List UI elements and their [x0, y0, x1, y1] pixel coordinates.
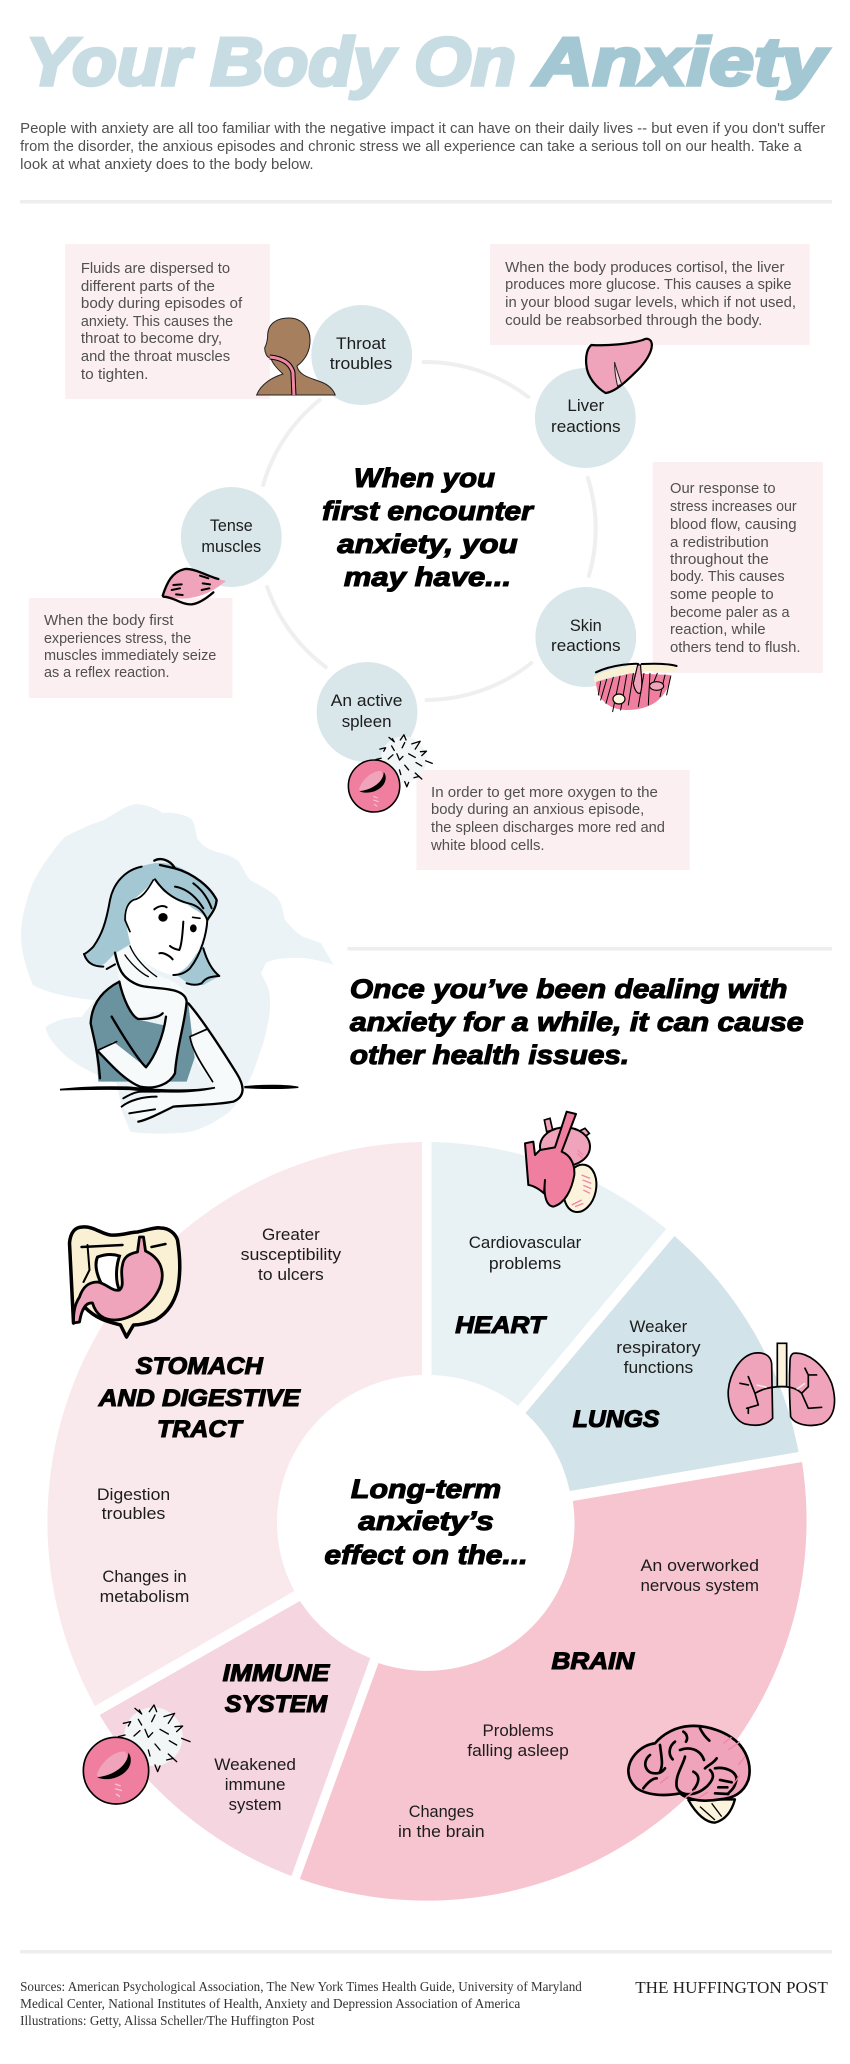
labels: stomach and digestive tract: Greater — [262, 1225, 320, 1244]
illustration: anxious woman — [21, 804, 334, 1134]
footer: sources: Medical Center, National Institutes of Health, Anxiety and Depression Association of America — [20, 1996, 521, 2012]
panel: liver reactions: produces more glucose. This causes a spike — [505, 276, 792, 293]
panel: throat troubles: different parts of the — [81, 278, 215, 295]
labels: brain — [398, 1556, 759, 1841]
labels: stomach and digestive tract: STOMACH — [136, 1353, 263, 1380]
panel: liver reactions: Liver — [567, 396, 605, 415]
labels: heart: Cardiovascular — [469, 1233, 582, 1252]
labels: brain: nervous system — [640, 1576, 759, 1595]
panel: skin reactions: throughout the — [670, 551, 769, 568]
panel: skin reactions: body. This causes — [670, 568, 785, 585]
panel: active spleen: spleen — [342, 712, 392, 731]
panel: tense muscles: muscles immediately seize — [44, 647, 216, 664]
donut centre heading: Long-term — [351, 1473, 501, 1504]
labels: immune system: system — [229, 1795, 282, 1814]
icon: skin section — [593, 664, 677, 712]
heading: long-term intro: other health issues. — [350, 1039, 629, 1070]
panel: throat troubles: Throat — [336, 334, 386, 353]
panel: liver reactions: reactions — [551, 417, 621, 436]
labels: immune system — [214, 1660, 330, 1814]
labels: lungs: Weaker — [630, 1317, 688, 1336]
labels: lungs — [573, 1317, 701, 1433]
panel: tense muscles: as a reflex reaction. — [44, 664, 169, 681]
panel: active spleen: An active — [331, 691, 402, 710]
segment: immune system — [100, 1601, 370, 1876]
footer: sources — [20, 1979, 582, 2029]
panel: liver reactions — [490, 244, 810, 468]
donut chart: long-term effects — [47, 1142, 807, 1901]
labels: stomach and digestive tract: TRACT — [157, 1416, 244, 1443]
segment: lungs — [526, 1236, 799, 1491]
panel: throat troubles — [65, 244, 412, 405]
heading: long-term intro: anxiety for a while, it can cause — [350, 1006, 804, 1037]
heading: when you first encounter: When you — [354, 462, 496, 493]
labels: heart: HEART — [455, 1312, 547, 1339]
segment: heart — [432, 1142, 666, 1406]
labels: lungs: LUNGS — [573, 1406, 659, 1433]
panel: skin reactions: stress increases our — [670, 498, 797, 515]
panel: tense muscles — [29, 487, 282, 698]
panel: skin reactions: Skin — [570, 616, 602, 635]
panel: throat troubles: and the throat muscles — [81, 348, 230, 365]
title — [26, 24, 829, 100]
panel: tense muscles: muscles — [201, 537, 261, 556]
labels: brain: in the brain — [398, 1822, 485, 1841]
labels: lungs: respiratory — [616, 1338, 701, 1357]
panel: skin reactions: reaction, while — [670, 621, 766, 638]
panel: liver reactions: could be reabsorbed through the body. — [505, 312, 762, 329]
intro text: People with anxiety are all too familiar with the negative impact it can have on their daily lives -- but even if you don't suffer — [20, 120, 825, 137]
heading: long-term intro — [350, 973, 804, 1070]
labels: stomach and digestive tract: AND DIGESTIVE — [98, 1385, 301, 1412]
labels: lungs: functions — [624, 1358, 693, 1377]
labels: brain: Problems — [482, 1721, 554, 1740]
icon: immune cells — [83, 1705, 190, 1804]
panel: active spleen: the spleen discharges more red and — [431, 819, 665, 836]
panel: throat troubles: to tighten. — [81, 366, 148, 383]
segment: brain — [300, 1462, 807, 1901]
panel: skin reactions: Our response to — [670, 480, 776, 497]
icon: blood cells — [348, 735, 432, 812]
labels: stomach and digestive tract: metabolism — [100, 1587, 189, 1606]
labels: brain: An overworked — [640, 1556, 759, 1575]
panel: throat troubles: throat to become dry, — [81, 330, 222, 347]
heading: when you first encounter: anxiety, you — [337, 528, 518, 559]
panel: tense muscles: When the body first — [44, 612, 174, 629]
labels: brain: BRAIN — [552, 1648, 635, 1675]
icon: liver — [586, 339, 652, 393]
labels: brain: Changes — [409, 1802, 474, 1821]
labels: heart: problems — [489, 1254, 561, 1273]
labels: stomach and digestive tract: Changes in — [102, 1567, 187, 1586]
panel: tense muscles: Tense — [210, 516, 253, 535]
segment: stomach and digestive tract — [47, 1142, 422, 1706]
intro text — [20, 120, 825, 173]
labels: brain: falling asleep — [467, 1741, 569, 1760]
panel: liver reactions: in your blood sugar levels, which if not used, — [505, 294, 796, 311]
icon: brain — [628, 1726, 750, 1823]
intro text: look at what anxiety does to the body below. — [20, 156, 314, 173]
panel: skin reactions: become paler as a — [670, 604, 790, 621]
panel: active spleen: In order to get more oxygen to the — [431, 784, 658, 801]
panel: active spleen — [317, 662, 690, 870]
heading: when you first encounter — [322, 462, 534, 592]
icon: muscle — [163, 569, 226, 604]
ring connecting symptoms — [263, 362, 596, 700]
labels: immune system: IMMUNE — [223, 1660, 330, 1687]
icon: throat — [257, 318, 335, 395]
icon: heart — [525, 1112, 601, 1215]
donut centre heading: anxiety’s — [358, 1505, 494, 1536]
labels: stomach and digestive tract: Digestion — [97, 1485, 170, 1504]
labels: heart — [455, 1233, 582, 1339]
labels: stomach and digestive tract: to ulcers — [258, 1265, 324, 1284]
panel: active spleen: white blood cells. — [430, 837, 545, 854]
panel: liver reactions: When the body produces cortisol, the liver — [505, 259, 784, 276]
panel: active spleen: body during an anxious episode, — [431, 801, 644, 818]
donut centre heading: effect on the... — [324, 1539, 528, 1570]
heading: when you first encounter: may have... — [344, 561, 511, 592]
panel: skin reactions: reactions — [551, 636, 621, 655]
footer: sources: Sources: American Psychological Association, The New York Times Health Guide, University of Maryland — [20, 1979, 582, 1995]
panel: throat troubles: body during episodes of — [81, 295, 243, 312]
panel: throat troubles: troubles — [330, 354, 392, 373]
footer: sources: Illustrations: Getty, Alissa Scheller/The Huffington Post — [20, 2013, 315, 2029]
labels: stomach and digestive tract: susceptibility — [241, 1245, 342, 1264]
labels: immune system: SYSTEM — [225, 1691, 328, 1718]
heading: long-term intro: Once you’ve been dealing with — [350, 973, 787, 1004]
heading: when you first encounter: first encounter — [322, 495, 534, 526]
panel: skin reactions: others tend to flush. — [670, 639, 800, 656]
panel: throat troubles: anxiety. This causes the — [81, 313, 233, 330]
panel: tense muscles: experiences stress, the — [44, 630, 191, 647]
panel: skin reactions: blood flow, causing — [670, 516, 797, 533]
labels: immune system: immune — [225, 1775, 286, 1794]
labels: stomach and digestive tract: troubles — [102, 1504, 165, 1523]
panel: skin reactions: a redistribution — [670, 534, 769, 551]
panel: skin reactions — [535, 462, 823, 712]
title: Anxiety — [532, 24, 829, 100]
title: Your Body On — [26, 24, 516, 100]
icon: lungs — [728, 1343, 835, 1425]
footer: publisher: THE HUFFINGTON POST — [635, 1978, 828, 1997]
labels: stomach and digestive tract — [97, 1225, 342, 1606]
panel: skin reactions: some people to — [670, 586, 774, 603]
intro text: from the disorder, the anxious episodes and chronic stress we all experience can take a serious toll on our health. Take a — [20, 138, 802, 155]
donut centre heading — [324, 1473, 528, 1570]
icon: stomach and intestine — [70, 1227, 180, 1337]
panel: throat troubles: Fluids are dispersed to — [81, 260, 230, 277]
labels: immune system: Weakened — [214, 1755, 296, 1774]
